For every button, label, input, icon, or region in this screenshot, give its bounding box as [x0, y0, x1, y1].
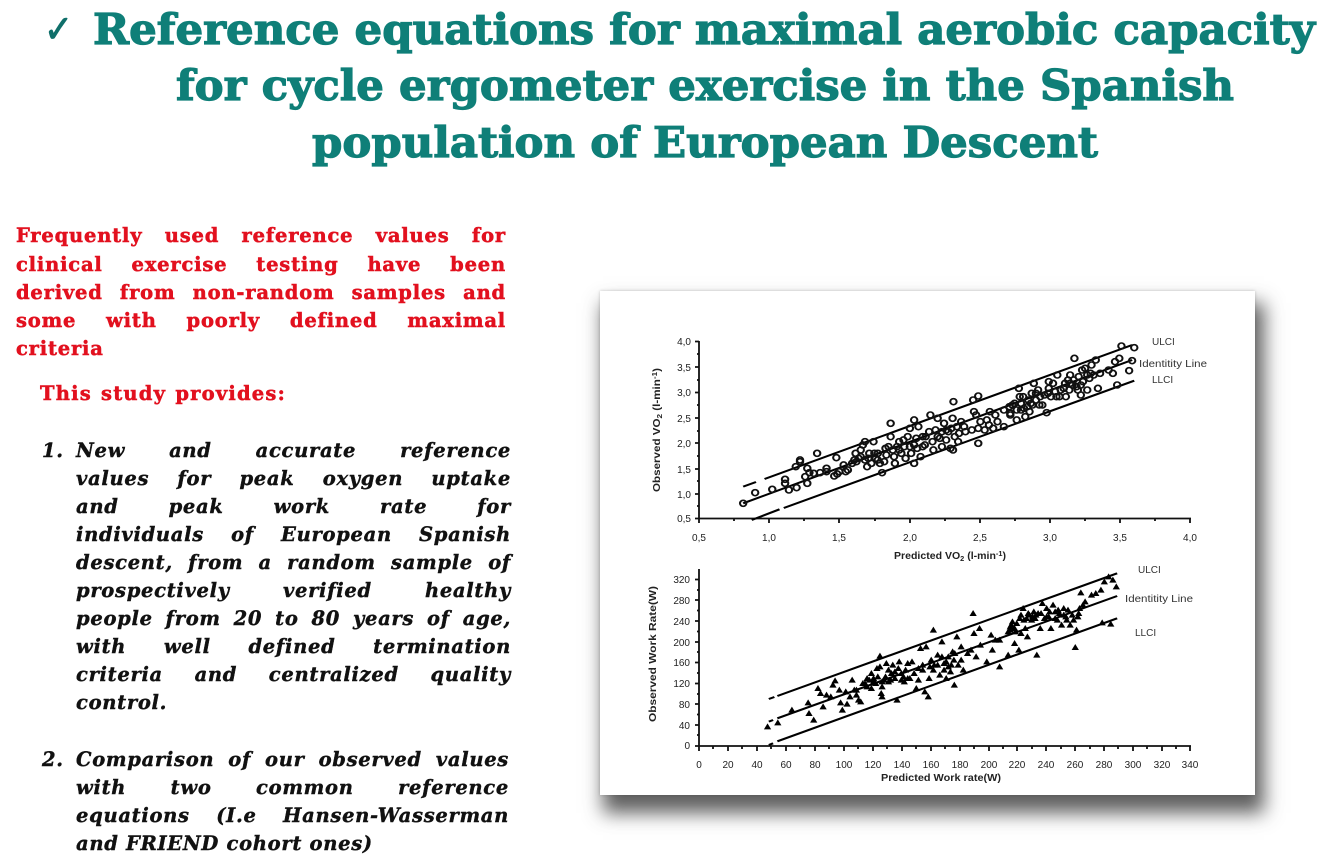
numbered item 2: equations (I.e Hansen-Wasserman — [76, 804, 509, 827]
x axis labels VO2: 1,5 — [832, 533, 846, 544]
title — [44, 5, 1317, 167]
x axis labels VO2: 2,0 — [903, 533, 917, 544]
axes VO2 — [695, 341, 1191, 523]
x axis labels work rate: 220 — [1009, 760, 1026, 771]
x axis labels work rate — [696, 760, 1199, 771]
numbered item 2 — [42, 748, 509, 855]
x axis labels VO2: 4,0 — [1183, 533, 1197, 544]
y axis labels VO2: 1,5 — [677, 465, 691, 476]
y axis labels work rate: 240 — [673, 617, 690, 628]
y axis labels work rate: 280 — [673, 596, 690, 607]
x axis labels work rate: 100 — [836, 760, 853, 771]
x axis title VO2: -1 — [996, 551, 1003, 558]
line labels work rate — [1125, 565, 1193, 639]
x axis labels work rate: 80 — [809, 760, 821, 771]
numbered item 2: and FRIEND cohort ones) — [76, 832, 373, 855]
y axis labels VO2: 0,5 — [677, 514, 691, 525]
y axis labels VO2: 2,0 — [677, 439, 691, 450]
y axis title VO2: ) — [652, 368, 663, 372]
y axis labels work rate — [673, 575, 690, 752]
chart: observed vs predicted VO2 scatter — [652, 337, 1207, 563]
line labels work rate: LLCI — [1135, 628, 1156, 639]
line labels VO2 — [1139, 337, 1207, 386]
x axis labels work rate: 320 — [1154, 760, 1171, 771]
data points work rate — [768, 577, 1116, 727]
line labels work rate: Identitity Line — [1125, 594, 1193, 605]
confidence and identity lines work rate — [768, 573, 1117, 745]
x axis title work rate: Predicted Work rate(W) — [881, 772, 1001, 784]
y axis labels work rate: 160 — [673, 658, 690, 669]
red introductory text block: some with poorly defined maximal — [16, 309, 506, 332]
red introductory text block — [16, 224, 506, 360]
y axis title work rate: Observed Work Rate(W) — [647, 586, 659, 722]
numbered item 1: with well defined termination — [76, 635, 511, 658]
numbered item 1: people from 20 to 80 years of age, — [76, 607, 511, 630]
x axis labels VO2: 3,5 — [1113, 533, 1127, 544]
subheading: this study provides: This study provides: — [40, 382, 286, 405]
x axis title VO2: ) — [1002, 551, 1006, 562]
x axis labels work rate: 200 — [981, 760, 998, 771]
numbered item 1: individuals of European Spanish — [76, 523, 511, 546]
numbered item 1: New and accurate reference — [76, 439, 511, 462]
y axis labels VO2: 4,0 — [677, 337, 691, 348]
x axis labels work rate: 120 — [865, 760, 882, 771]
line labels VO2: LLCI — [1152, 375, 1173, 386]
y axis labels work rate: 80 — [679, 700, 690, 711]
x axis labels VO2: 2,5 — [973, 533, 987, 544]
chart: observed vs predicted work rate scatter — [647, 565, 1199, 784]
numbered item 1: 1. — [42, 439, 64, 462]
red introductory text block: clinical exercise testing have been — [16, 253, 506, 276]
x axis labels work rate: 160 — [923, 760, 940, 771]
y axis labels work rate: 320 — [673, 575, 690, 586]
line labels VO2: Identitity Line — [1139, 359, 1207, 370]
x axis title VO2: (l-min — [964, 551, 996, 562]
x axis title VO2: 2 — [960, 556, 964, 563]
data points VO2 — [743, 346, 1134, 503]
confidence and identity lines VO2 — [743, 345, 1134, 520]
numbered item 2: with two common reference — [76, 776, 509, 799]
numbered item 1 — [42, 439, 514, 714]
title: population of European Descent — [312, 118, 1099, 167]
y axis title VO2: (l-min — [652, 379, 663, 414]
red introductory text block: derived from non-random samples and — [16, 281, 506, 304]
x axis labels work rate: 140 — [894, 760, 911, 771]
y axis labels work rate: 40 — [679, 721, 690, 732]
x axis labels work rate: 240 — [1038, 760, 1055, 771]
y axis title VO2: 2 — [657, 414, 664, 418]
y axis title VO2: -1 — [652, 372, 659, 379]
title: ✓ — [44, 7, 73, 51]
y axis labels VO2: 1,0 — [677, 490, 691, 501]
numbered item 1: and peak work rate for — [76, 495, 511, 518]
x axis labels VO2: 1,0 — [762, 533, 776, 544]
y axis labels VO2: 3,5 — [677, 363, 691, 374]
y axis labels work rate: 200 — [673, 638, 690, 649]
y axis labels work rate: 0 — [684, 741, 690, 752]
red introductory text block: Frequently used reference values for — [16, 224, 506, 247]
numbered item 1: descent, from a random sample of — [76, 551, 511, 574]
x axis labels VO2: 3,0 — [1043, 533, 1057, 544]
x axis labels work rate: 40 — [751, 760, 763, 771]
x axis labels work rate: 60 — [780, 760, 792, 771]
x axis labels work rate: 20 — [722, 760, 734, 771]
title: Reference equations for maximal aerobic capacity — [93, 5, 1317, 54]
numbered item 1: values for peak oxygen uptake — [76, 467, 511, 490]
x axis labels work rate: 340 — [1182, 760, 1199, 771]
numbered item 1: prospectively verified healthy — [76, 579, 511, 602]
axes work rate — [695, 569, 1191, 751]
red introductory text block: criteria — [16, 337, 104, 360]
y axis labels VO2: 2,5 — [677, 414, 691, 425]
y axis labels work rate: 120 — [673, 679, 690, 690]
line labels VO2: ULCI — [1152, 337, 1175, 348]
x axis title VO2: Predicted VO — [894, 551, 957, 562]
y axis labels VO2 — [677, 337, 691, 525]
line labels work rate: ULCI — [1138, 565, 1161, 576]
x axis labels work rate: 300 — [1125, 760, 1142, 771]
panel: chart card with shadow — [600, 291, 1255, 795]
numbered item 1: control. — [76, 691, 167, 714]
x axis labels work rate: 280 — [1096, 760, 1113, 771]
numbered item 1: criteria and centralized quality — [76, 663, 511, 686]
x axis labels VO2 — [692, 533, 1197, 544]
x axis labels work rate: 180 — [952, 760, 969, 771]
numbered item 2: Comparison of our observed values — [76, 748, 509, 771]
y axis labels VO2: 3,0 — [677, 388, 691, 399]
x axis labels work rate: 0 — [696, 760, 702, 771]
y axis title VO2: Observed VO — [652, 429, 663, 492]
title: for cycle ergometer exercise in the Spanish — [176, 61, 1234, 110]
x axis labels VO2: 0,5 — [692, 533, 706, 544]
x axis labels work rate: 260 — [1067, 760, 1084, 771]
numbered item 2: 2. — [42, 748, 64, 771]
